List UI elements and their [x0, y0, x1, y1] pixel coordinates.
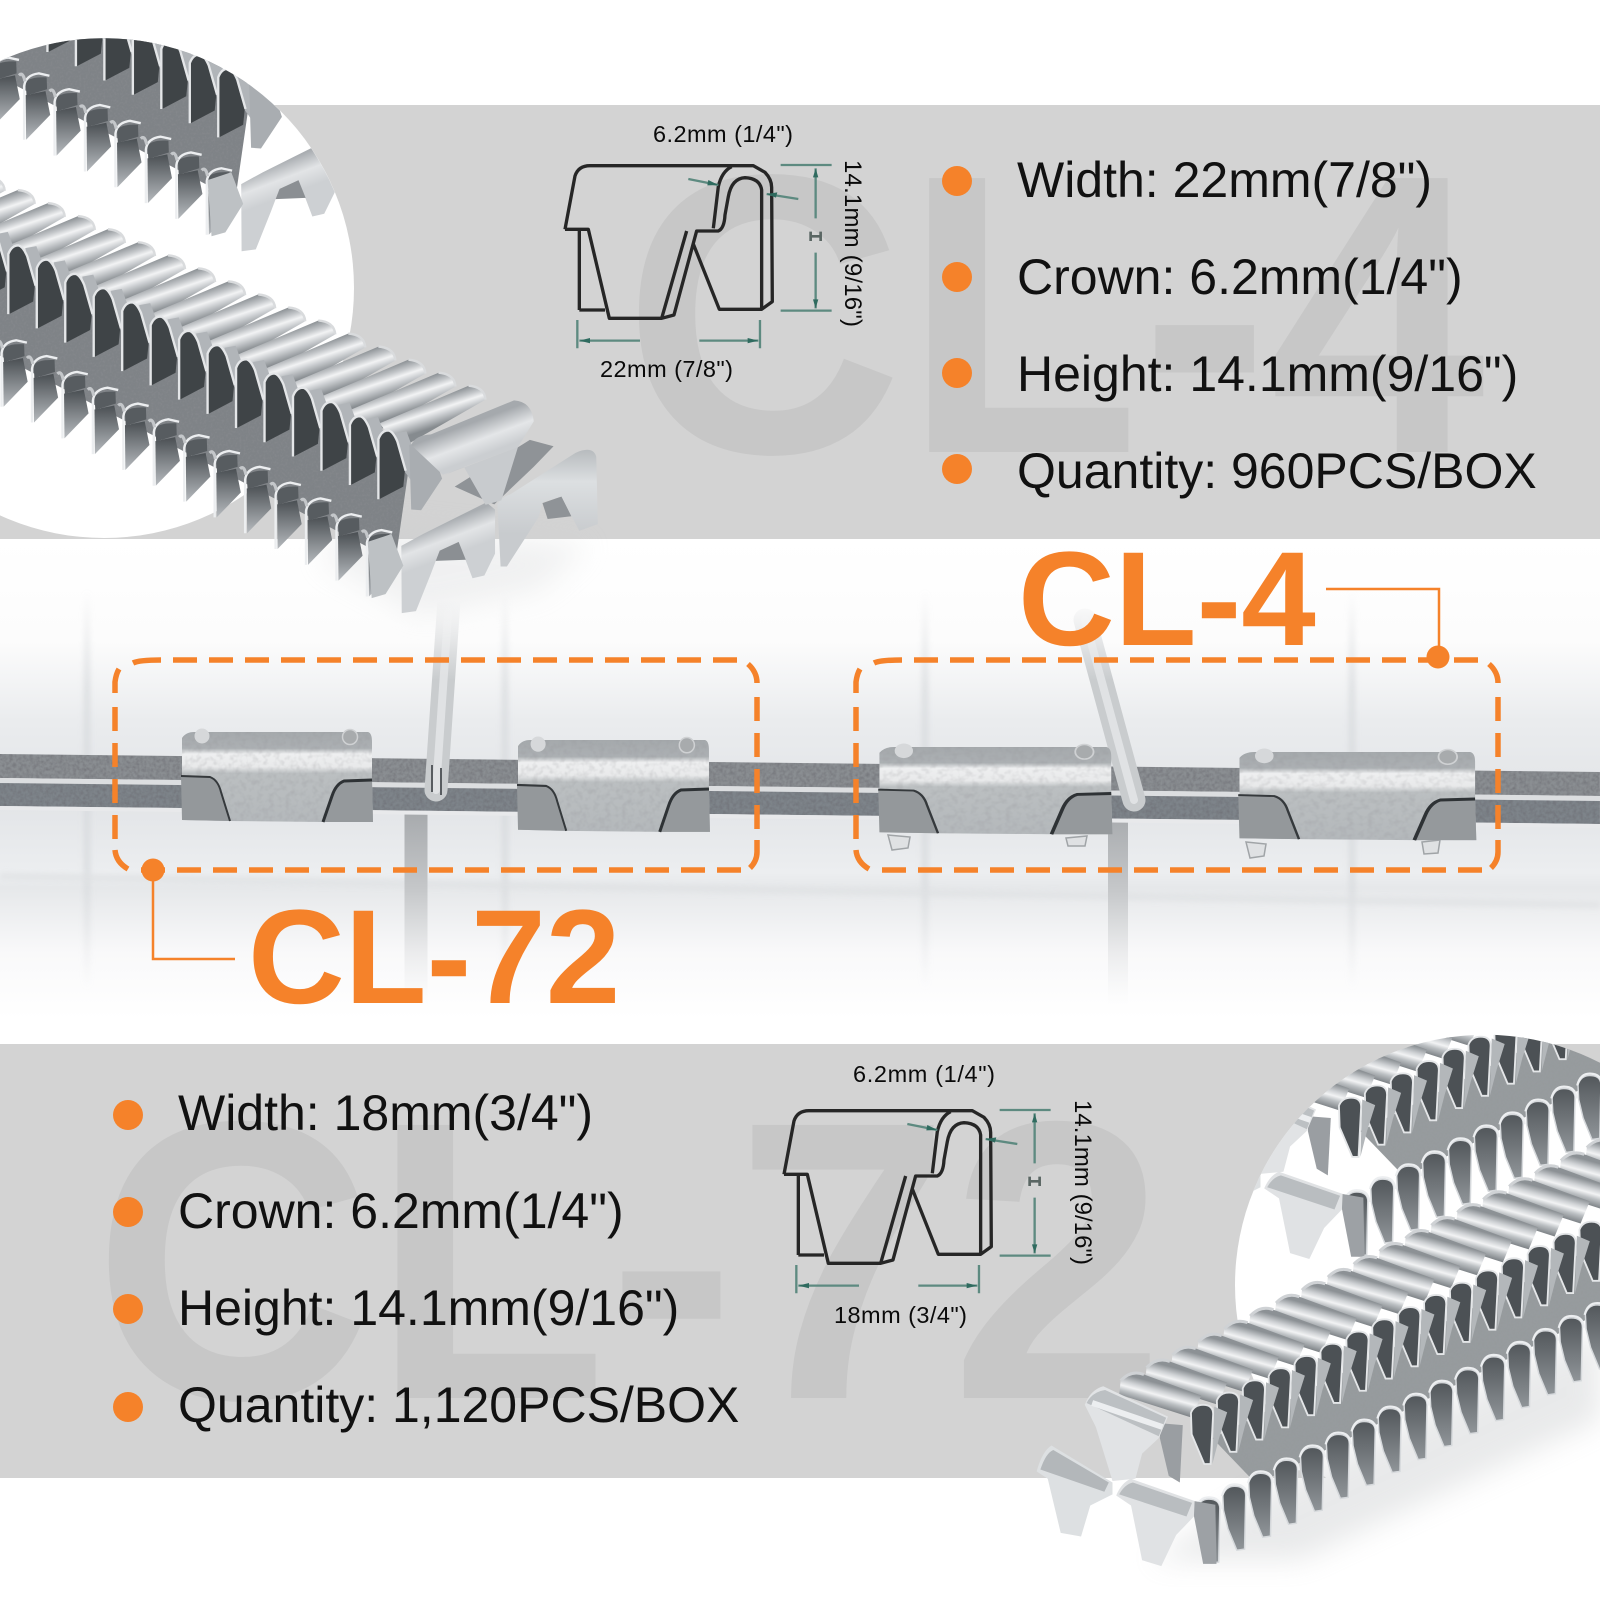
rear strip: [1185, 820, 1600, 1259]
diagram: CL-72 dimensions: [784, 1061, 1096, 1328]
callout: CL-72: [142, 858, 620, 1032]
mesh wall backdrop: [0, 540, 1600, 1044]
highlight box: CL-72 clips: [115, 660, 757, 870]
clip 3: [878, 744, 1112, 850]
watermark: CL-4: CL-4: [623, 93, 1488, 537]
spec quantity: Quantity: 1,120PCS/BOX: [178, 1377, 739, 1433]
spec list: CL-72: [113, 1085, 739, 1433]
dimension marks: [796, 1110, 1051, 1293]
bullet quantity: [942, 454, 972, 484]
spec width: Width: 22mm(7/8"): [1017, 152, 1432, 208]
width label: 18mm (3/4"): [834, 1302, 967, 1328]
white circle behind strips: [1235, 1035, 1600, 1535]
label CL-72: CL-72: [248, 883, 620, 1032]
angled wire right: [1085, 620, 1134, 800]
crown label: 6.2mm (1/4"): [653, 121, 793, 147]
angled wire left: [432, 600, 449, 795]
spec height: Height: 14.1mm(9/16"): [1017, 346, 1518, 402]
width label: 22mm (7/8"): [600, 356, 733, 382]
spec width: Width: 18mm(3/4"): [178, 1085, 593, 1141]
spec crown: Crown: 6.2mm(1/4"): [178, 1183, 624, 1239]
height label: 14.1mm (9/16"): [839, 160, 866, 327]
crown label: 6.2mm (1/4"): [853, 1061, 995, 1087]
leader dot CL-72: [142, 858, 164, 882]
vertical wire right: [1108, 812, 1128, 1020]
leader line CL-4: [1326, 589, 1439, 656]
photo: CL-72 staple strips: [1037, 1034, 1600, 1566]
callout: CL-4: [1018, 525, 1450, 674]
label CL-4: CL-4: [1018, 525, 1316, 674]
front strip: [1037, 1127, 1600, 1566]
panel: CL-4 specifications background: [0, 93, 1600, 539]
bullet quantity: [113, 1392, 143, 1422]
front strip: [0, 154, 598, 613]
clip 4: [1238, 749, 1476, 858]
diagram: CL-4 dimensions: [565, 121, 866, 382]
shadow under strip: [1150, 1330, 1600, 1560]
bullet width: [113, 1100, 143, 1130]
bullet height: [113, 1294, 143, 1324]
bullet crown: [942, 262, 972, 292]
panel: CL-72 specifications background: [0, 1039, 1600, 1482]
highlight box: CL-4 clips: [856, 660, 1498, 870]
bullet width: [942, 166, 972, 196]
spec quantity: Quantity: 960PCS/BOX: [1017, 443, 1537, 499]
leader dot CL-4: [1426, 646, 1450, 668]
watermark: CL-72: CL-72: [93, 1039, 1165, 1482]
vertical wire left: [404, 812, 428, 1010]
height label: 14.1mm (9/16"): [1069, 1100, 1096, 1265]
horizontal rod: [0, 754, 1600, 828]
staple outline: [565, 166, 772, 318]
rear strip: [0, 0, 438, 251]
leader line CL-72: [153, 870, 235, 959]
bullet crown: [113, 1197, 143, 1227]
clip 2: [517, 736, 710, 832]
spec list: CL-4: [942, 152, 1537, 499]
spec height: Height: 14.1mm(9/16"): [178, 1280, 679, 1336]
staple outline: [784, 1111, 991, 1263]
dimension marks: [577, 165, 832, 348]
clip 1: [181, 728, 373, 822]
mesh wires and clips photo: [0, 600, 1600, 1020]
white circle behind strips: [0, 38, 354, 538]
bullet height: [942, 358, 972, 388]
photo: CL-4 staple strips: [0, 0, 598, 615]
shadow under strip: [320, 520, 590, 615]
spec crown: Crown: 6.2mm(1/4"): [1017, 249, 1463, 305]
